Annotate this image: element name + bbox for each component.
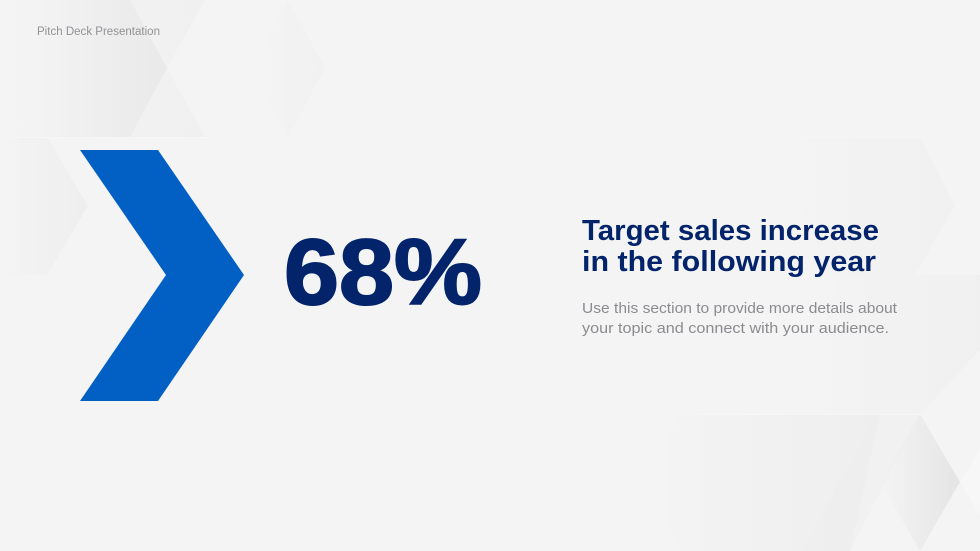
description text <box>582 300 898 337</box>
big stat: 68%: 68% <box>284 220 482 324</box>
icon: blue chevron arrow <box>80 150 244 401</box>
heading: Target sales increase <box>582 215 879 247</box>
description text: your topic and connect with your audience. <box>582 320 889 337</box>
description text: Use this section to provide more details about <box>582 300 898 317</box>
heading: in the following year <box>582 246 876 278</box>
heading <box>582 215 879 278</box>
header label: Pitch Deck Presentation <box>37 26 160 38</box>
